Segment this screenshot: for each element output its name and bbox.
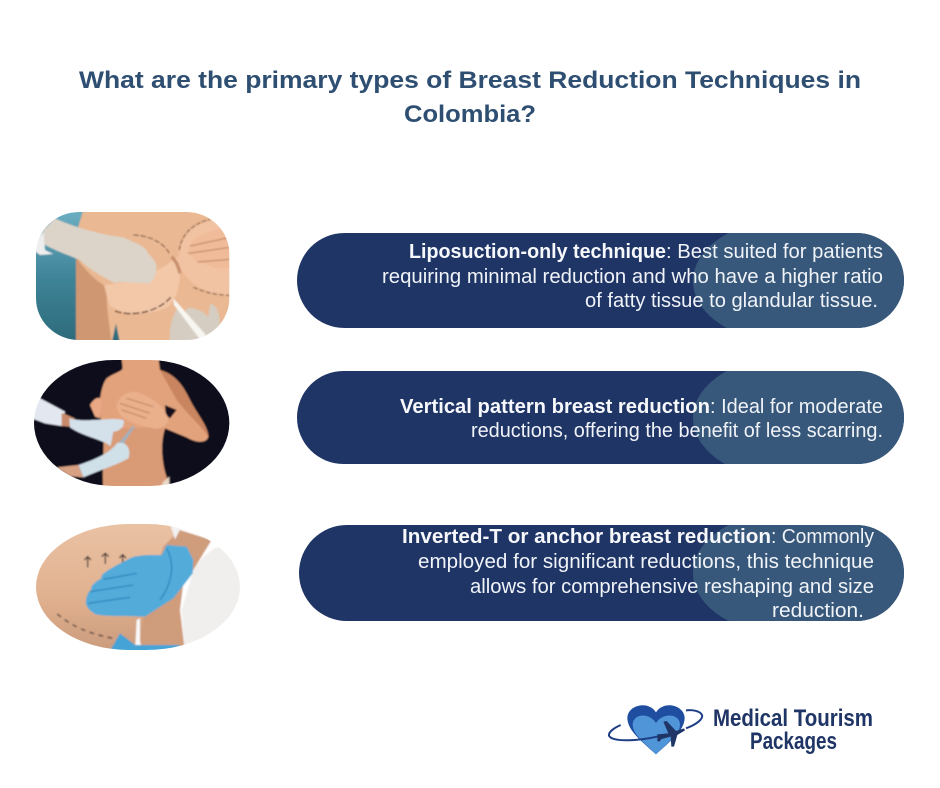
logo wordmark (713, 705, 873, 755)
logo: Medical Tourism Packages (609, 705, 873, 755)
panel: vertical pattern breast reduction (297, 371, 904, 464)
panel: liposuction-only technique: requiring minimal reduction and who have a higher ratio (382, 266, 883, 288)
title: What are the primary types of Breast Reduction Techniques in (79, 67, 861, 94)
panel: inverted-T or anchor breast reduction: allows for comprehensive reshaping and size (470, 576, 874, 598)
panel: inverted-T or anchor breast reduction: reduction. (772, 600, 864, 622)
panel: vertical pattern breast reduction: reductions, offering the benefit of less scarring. (471, 420, 883, 442)
panel: inverted-T or anchor breast reduction: Inverted-T or anchor breast reduction (402, 526, 771, 548)
title: Colombia? (404, 101, 536, 128)
panel: liposuction-only technique (297, 233, 904, 328)
photo: gloved hands marking breast with surgical pen (33, 210, 233, 343)
panel: inverted-T or anchor breast reduction: employed for significant reductions, this technique (418, 551, 874, 573)
panel: vertical pattern breast reduction: : Ideal for moderate (710, 396, 883, 418)
panel: liposuction-only technique: : Best suited for patients (666, 241, 883, 263)
panel: inverted-T or anchor breast reduction: : Commonly (771, 526, 874, 548)
panel: vertical pattern breast reduction: Vertical pattern breast reduction (400, 396, 710, 418)
logo wordmark: Medical Tourism (713, 705, 873, 732)
photo: blue gloved hand on marked breast (33, 522, 243, 652)
panel: liposuction-only technique: Liposuction-only technique (409, 241, 666, 263)
panel: liposuction-only technique: of fatty tissue to glandular tissue. (585, 290, 878, 312)
icon: heart with orbit and plane (609, 705, 702, 754)
logo wordmark: Packages (750, 728, 837, 755)
title (79, 67, 861, 128)
panel: inverted-T or anchor breast reduction (299, 525, 904, 621)
photo: surgical marking on torso, dark background (32, 358, 232, 488)
